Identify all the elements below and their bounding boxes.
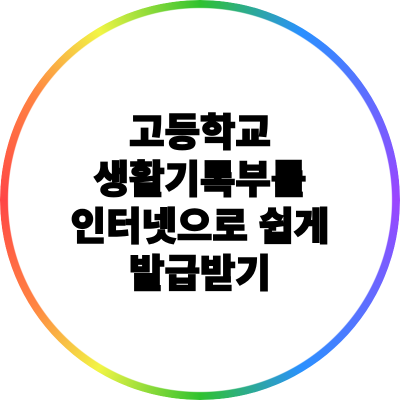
title <box>71 112 329 296</box>
title: 발급받기 <box>129 253 271 296</box>
title: 생활기록부를 <box>94 159 306 202</box>
title: 고등학교 <box>129 112 271 155</box>
title: 인터넷으로 쉽게 <box>71 206 329 249</box>
